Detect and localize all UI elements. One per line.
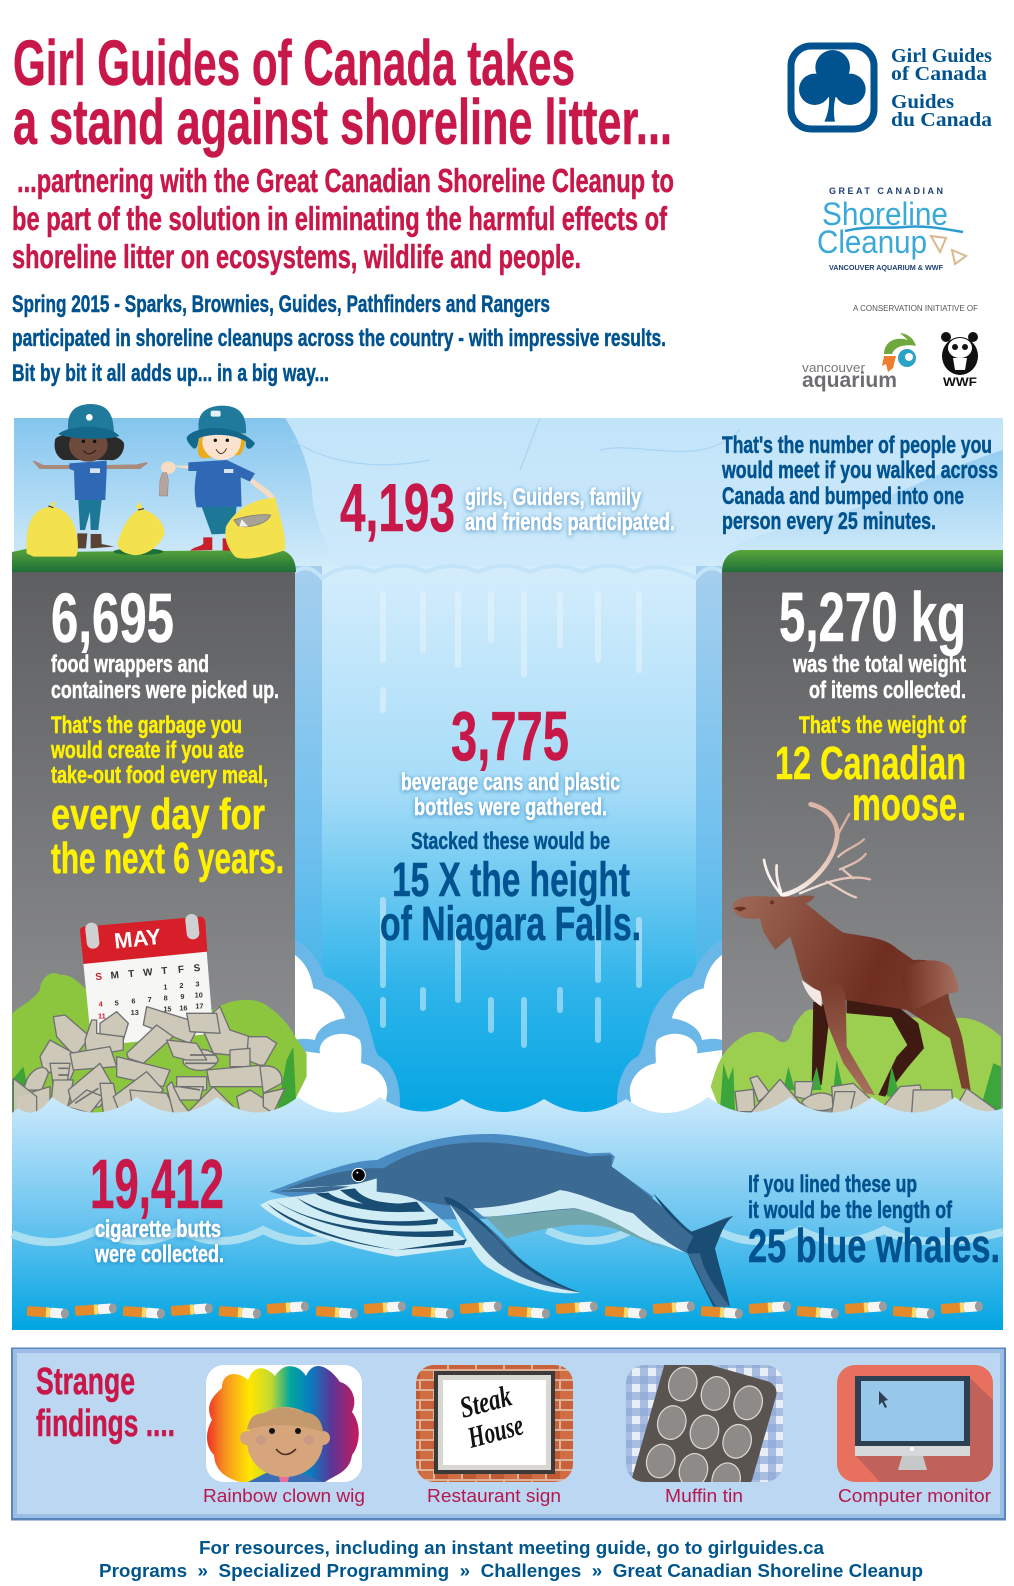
- stat: participants: [340, 470, 675, 546]
- logo: Vancouver Aquarium: aquarium: [802, 369, 897, 392]
- moose scene: [711, 804, 1001, 1113]
- antlers: [764, 804, 870, 897]
- fact: blue whales: If you lined these up: [748, 1171, 917, 1198]
- stat: beverage cans: of Niagara Falls.: [380, 898, 641, 951]
- logo: Girl Guides of Canada: [791, 45, 992, 131]
- water band: [12, 1097, 1003, 1330]
- stat: cigarette butts: 19,412: [90, 1145, 224, 1223]
- icon: restaurant sign: [416, 1365, 573, 1482]
- grass and litter: [720, 1060, 1001, 1110]
- logo: Girl Guides of Canada: Guides: [891, 91, 954, 113]
- title: a stand against shoreline litter...: [13, 86, 672, 158]
- calendar: M: [110, 970, 119, 982]
- calendar: 13: [131, 1008, 139, 1017]
- far legs: [812, 1000, 924, 1097]
- panel: strange findings: [12, 1349, 1004, 1519]
- calendar: F: [178, 964, 185, 976]
- fact: people met walking across Canada: person every 25 minutes.: [722, 508, 936, 535]
- icon labels: Restaurant sign: [427, 1485, 561, 1506]
- right cliff panel: [722, 570, 1003, 1120]
- stat: beverage cans: 3,775: [451, 697, 569, 775]
- icon labels: [203, 1485, 991, 1506]
- subtitle: ...partnering with the Great Canadian Shoreline Cleanup to: [17, 162, 674, 199]
- stat: food wrappers: would create if you ate: [50, 737, 244, 764]
- moose body: [732, 896, 971, 1090]
- calendar: 8: [164, 994, 168, 1003]
- calendar: 5: [115, 998, 119, 1007]
- heading: strange findings: findings ....: [36, 1403, 175, 1445]
- stat: cigarette butts: were collected.: [94, 1241, 224, 1268]
- stat: food wrappers: food wrappers and: [51, 651, 209, 678]
- stat: beverage cans: 15 X the height: [392, 854, 630, 907]
- logo: Great Canadian Shoreline Cleanup: [817, 186, 966, 272]
- icon: restaurant sign: Steak: [456, 1379, 515, 1425]
- footer: [99, 1538, 923, 1581]
- stat: food wrappers: the next 6 years.: [51, 834, 284, 883]
- calendar: 16: [179, 1003, 187, 1012]
- intro text: Spring 2015 - Sparks, Brownies, Guides, Pathfinders and Rangers: [12, 291, 550, 318]
- footer: For resources, including an instant meeting guide, go to girlguides.ca: [199, 1538, 825, 1558]
- stat: participants: and friends participated.: [465, 509, 675, 536]
- character: girl with blonde hair: [159, 406, 285, 559]
- footer: Programs » Specialized Programming » Challenges » Great Canadian Shoreline Cleanup: [99, 1561, 923, 1581]
- icon: restaurant sign: House: [464, 1408, 527, 1455]
- icon labels: Computer monitor: [838, 1485, 991, 1506]
- logo: Great Canadian Shoreline Cleanup: Shoreline: [822, 196, 948, 232]
- stat: food wrappers: [50, 579, 284, 883]
- stat: beverage cans: bottles were gathered.: [414, 794, 607, 821]
- calendar: T: [128, 969, 135, 980]
- calendar: MAY: [113, 924, 162, 954]
- logo: Vancouver Aquarium: vancouver: [802, 360, 866, 375]
- stat: beverage cans: [380, 697, 641, 951]
- right grass: [722, 550, 1003, 572]
- logo: Girl Guides of Canada: of Canada: [891, 63, 987, 85]
- calendar: 10: [195, 991, 203, 1000]
- icon: rainbow clown wig: [206, 1365, 362, 1482]
- calendar: 4: [99, 1000, 104, 1009]
- logo: Vancouver Aquarium: [802, 333, 916, 392]
- calendar: S: [95, 972, 103, 983]
- subtitle: shoreline litter on ecosystems, wildlife and people.: [12, 238, 581, 275]
- icon labels: Muffin tin: [665, 1485, 743, 1506]
- icon labels: Rainbow clown wig: [203, 1485, 365, 1506]
- subtitle: [12, 162, 674, 275]
- icon: muffin tin: [626, 1365, 783, 1482]
- title: [13, 27, 672, 158]
- calendar: [80, 913, 213, 1047]
- logo: WWF panda: [941, 332, 978, 389]
- logo: Girl Guides of Canada: Girl Guides: [891, 45, 992, 67]
- stat: beverage cans: Stacked these would be: [411, 828, 610, 855]
- calendar: W: [143, 967, 154, 979]
- stat: total weight: of items collected.: [809, 677, 966, 704]
- left cliff panel: [12, 570, 295, 1120]
- logo: WWF panda: WWF: [943, 375, 977, 389]
- calendar: 11: [98, 1011, 106, 1020]
- trash bags: [26, 502, 164, 557]
- heading: strange findings: [36, 1361, 175, 1445]
- intro text: Bit by bit it all adds up... in a big way...: [12, 360, 329, 387]
- calendar: 15: [163, 1005, 171, 1014]
- intro text: [12, 291, 666, 387]
- calendar: S: [193, 963, 201, 974]
- calendar: 1: [163, 982, 167, 991]
- icon: computer monitor: [837, 1365, 993, 1482]
- fact: blue whales: [748, 1171, 1000, 1272]
- calendar: 2: [179, 981, 183, 990]
- stat: participants: 4,193: [340, 470, 455, 546]
- logo: Great Canadian Shoreline Cleanup: VANCOUVER AQUARIUM & WWF: [829, 265, 944, 272]
- intro text: participated in shoreline cleanups across the country - with impressive results.: [12, 325, 666, 352]
- calendar: 17: [195, 1002, 203, 1011]
- stat: food wrappers: every day for: [51, 790, 265, 839]
- stat: total weight: moose.: [852, 778, 966, 830]
- sky background with map: [14, 418, 1003, 578]
- left cloud: [295, 940, 400, 1120]
- left bushes: [12, 973, 307, 1113]
- stat: food wrappers: take-out food every meal,: [51, 762, 268, 789]
- character: girl with dark hair: [33, 404, 147, 548]
- left grass: [12, 548, 296, 572]
- calendar: 9: [180, 992, 184, 1001]
- waterfall: [295, 566, 722, 1126]
- subtitle: be part of the solution in eliminating the harmful effects of: [12, 200, 668, 237]
- calendar: 6: [131, 997, 135, 1006]
- stat: food wrappers: 6,695: [51, 579, 174, 657]
- whale: [260, 1134, 733, 1307]
- logo: Girl Guides of Canada: du Canada: [891, 109, 992, 131]
- calendar: 7: [148, 995, 152, 1004]
- right cloud: [617, 940, 722, 1120]
- fact: people met walking across Canada: [721, 432, 998, 535]
- stat: food wrappers: containers were picked up.: [51, 677, 279, 704]
- stat: participants: girls, Guiders, family: [465, 484, 641, 511]
- calendar: 3: [195, 980, 199, 989]
- bushes behind moose: [711, 1009, 1001, 1110]
- title: Girl Guides of Canada takes: [13, 27, 575, 99]
- logo: Great Canadian Shoreline Cleanup: GREAT CANADIAN: [829, 186, 943, 196]
- stat: food wrappers: That's the garbage you: [51, 712, 242, 739]
- stat: total weight: [775, 578, 967, 830]
- stat: cigarette butts: cigarette butts: [95, 1216, 221, 1243]
- calendar: T: [161, 966, 168, 977]
- logo: Great Canadian Shoreline Cleanup: Cleanup: [817, 224, 927, 260]
- litter pile: [13, 1007, 285, 1113]
- cigarette butts row: [27, 1301, 983, 1319]
- conservation initiative text: A CONSERVATION INITIATIVE OF: [853, 304, 978, 313]
- stat: beverage cans: beverage cans and plastic: [401, 769, 620, 796]
- heading: strange findings: Strange: [36, 1361, 135, 1403]
- stat: cigarette butts: [90, 1145, 224, 1268]
